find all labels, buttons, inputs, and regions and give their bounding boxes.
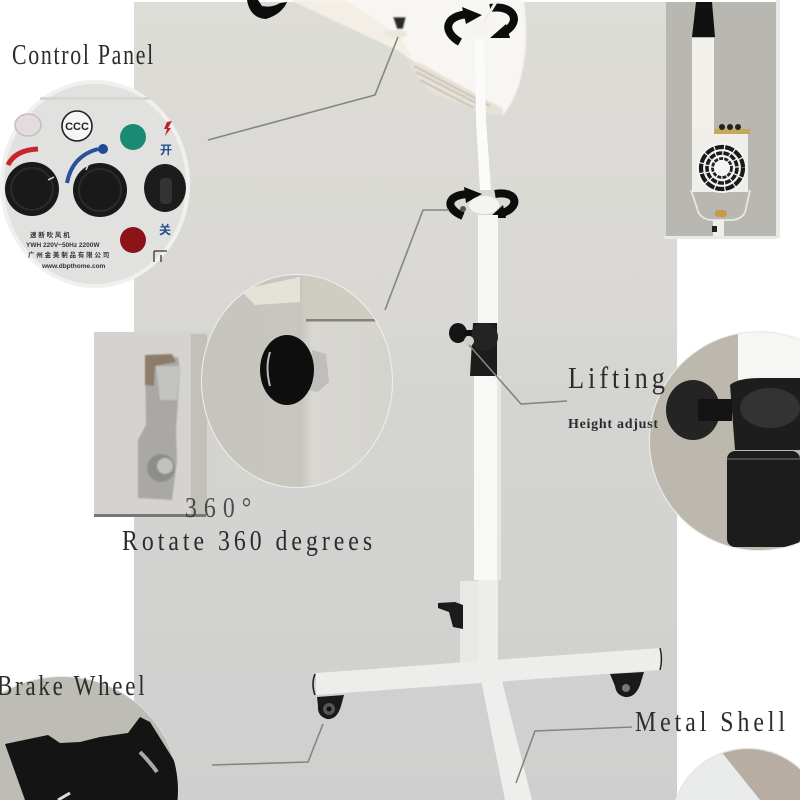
logo bbox=[15, 114, 41, 136]
lightning mark bbox=[164, 121, 172, 136]
photo: lifting detail bbox=[649, 330, 800, 555]
photo: brake wheel detail bbox=[0, 670, 180, 800]
upper rotation arrows bbox=[448, 2, 514, 42]
fan knob bbox=[73, 163, 127, 217]
heat arc bbox=[8, 149, 38, 165]
stand pole bbox=[474, 215, 532, 800]
wheel: rear bbox=[438, 602, 463, 629]
heading: brake wheel: Brake Wheel bbox=[0, 670, 145, 702]
fan arc bbox=[67, 149, 98, 183]
spec print: www.dbpthome.com bbox=[41, 263, 106, 270]
black neck bbox=[692, 2, 715, 37]
heat knob bbox=[5, 162, 59, 216]
photo: rotate knob detail bbox=[200, 274, 396, 490]
photo: dryer rear view bbox=[664, 0, 780, 239]
lifting knob bbox=[666, 380, 720, 440]
heading: lifting: Lifting bbox=[568, 361, 665, 396]
text: height adjust: Height adjust bbox=[568, 417, 658, 432]
air vent bbox=[408, 62, 503, 116]
rear leg bbox=[460, 581, 478, 666]
spec print: 广 州 金 美 制 品 有 限 公 司 bbox=[28, 250, 109, 259]
photo: control panel detail bbox=[0, 80, 190, 288]
photo: bracket detail bbox=[94, 332, 220, 517]
callout line: lifting bbox=[469, 345, 567, 404]
spec print: 速 断 吹 风 机 bbox=[30, 230, 70, 239]
switch off label: 关 bbox=[159, 222, 171, 237]
background panel bbox=[134, 2, 677, 800]
height collar bbox=[449, 323, 498, 376]
heading: control panel: Control Panel bbox=[12, 41, 153, 71]
corner mark bbox=[154, 251, 167, 262]
spec print: YWH 220V~50Hz 2200W bbox=[26, 242, 100, 249]
dryer body bbox=[692, 130, 748, 192]
head knob bbox=[385, 17, 407, 38]
callout line: metal shell bbox=[516, 727, 632, 783]
wheel: left bbox=[317, 695, 344, 719]
top black arrow fragment bbox=[247, 0, 287, 19]
certification mark bbox=[62, 111, 92, 141]
callout line: brake wheel bbox=[212, 724, 323, 765]
fan grille bbox=[697, 143, 747, 193]
metal hinge bbox=[138, 354, 180, 500]
wheel: right bbox=[610, 672, 644, 697]
callout line: rotate bbox=[385, 210, 449, 310]
switch on label: 开 bbox=[160, 143, 172, 157]
red lamp bbox=[120, 227, 146, 253]
photo: metal shell detail bbox=[670, 745, 800, 800]
cross bar bbox=[313, 648, 662, 695]
heading: rotate 360 degrees: Rotate 360 degrees bbox=[122, 524, 372, 557]
power switch bbox=[144, 164, 186, 212]
green lamp bbox=[120, 124, 146, 150]
spec print bbox=[26, 230, 109, 270]
heading: 360: 360° bbox=[185, 492, 251, 523]
callout line: control panel bbox=[208, 37, 398, 140]
black knob bbox=[260, 335, 329, 405]
white tube bbox=[692, 38, 714, 138]
neck tube bbox=[475, 40, 491, 190]
control strip bbox=[714, 124, 750, 134]
lamp head bbox=[290, 0, 526, 116]
wire frame bbox=[691, 190, 750, 220]
lower rotation arrows bbox=[450, 187, 514, 218]
heading: metal shell: Metal Shell bbox=[635, 705, 785, 738]
certification mark: CCC bbox=[65, 121, 89, 133]
